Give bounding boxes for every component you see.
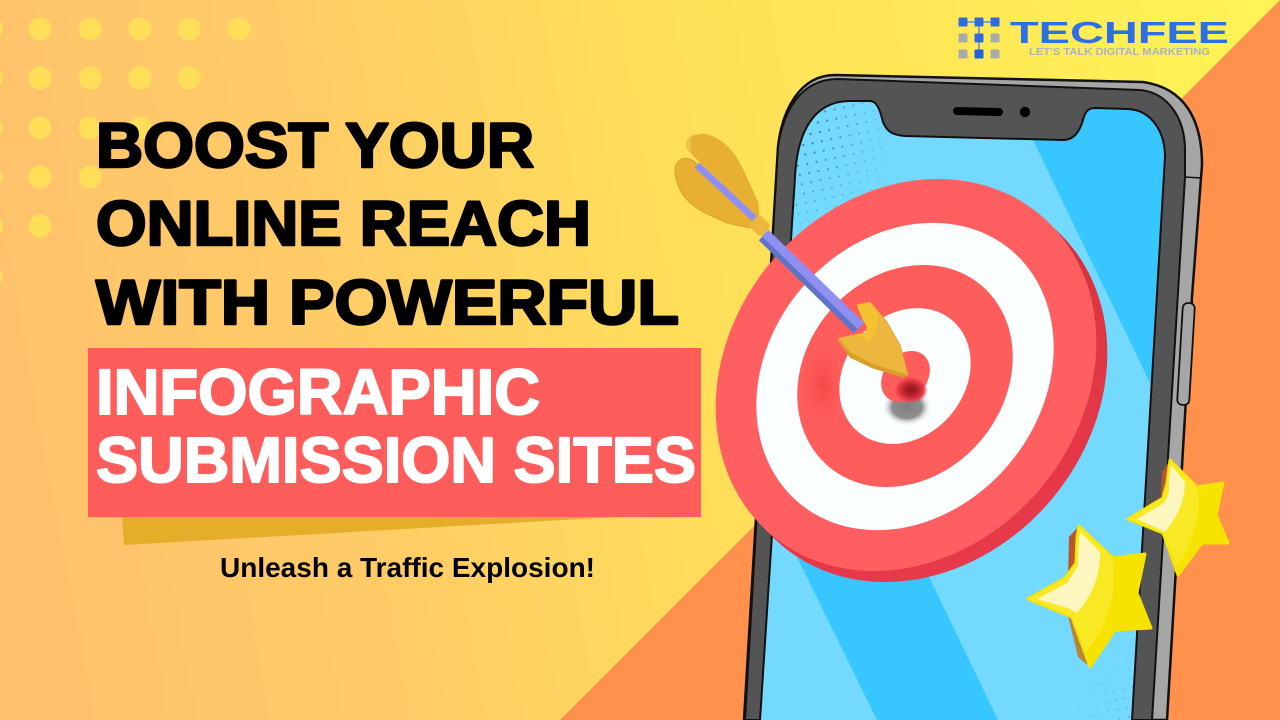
target board [637, 102, 1186, 659]
logo icon [958, 18, 1000, 58]
arrow shaft [763, 233, 861, 329]
decorative dot grid [0, 18, 250, 288]
camera [1020, 107, 1030, 117]
red banner [88, 348, 701, 517]
logo tagline: LET'S TALK DIGITAL MARKETING [1029, 47, 1210, 58]
headline line 3: WITH POWERFUL [96, 268, 679, 338]
target depth [648, 113, 1186, 659]
bullseye [871, 341, 940, 412]
orange diagonal triangle [560, 0, 1280, 720]
white ring [695, 163, 1115, 590]
banner text line 2: SUBMISSION SITES [96, 424, 696, 496]
phone frame [744, 75, 1202, 720]
headline [96, 111, 679, 338]
speaker [957, 111, 999, 112]
arrow [675, 134, 908, 377]
star face [1028, 526, 1151, 667]
logo: Techfee [958, 15, 1229, 58]
arrow collar [748, 214, 771, 237]
inner red ring [753, 221, 1057, 531]
banner shadow [122, 517, 615, 545]
shadow under arrow [882, 388, 932, 426]
smartphone [744, 75, 1202, 720]
star highlight [1137, 465, 1185, 532]
headline line 1: BOOST YOUR [96, 111, 534, 181]
arrow head [838, 302, 908, 377]
inner white ring [812, 282, 998, 470]
bullseye hit shade [894, 376, 928, 404]
subtitle: Unleash a Traffic Explosion! [220, 552, 595, 583]
side button [1177, 303, 1195, 405]
star face [1128, 460, 1228, 575]
phone bezel [745, 79, 1185, 720]
phone screen [755, 90, 1175, 720]
star: large [1028, 526, 1151, 667]
star: small [1128, 460, 1228, 575]
headline line 2: ONLINE REACH [96, 189, 591, 259]
ring shading [799, 337, 847, 433]
star midtone [1028, 526, 1114, 652]
arrow rear shaft [697, 165, 757, 221]
screen outline [760, 101, 1165, 720]
banner background [88, 348, 701, 517]
frame seam [1185, 177, 1201, 178]
arrow fletching [675, 134, 759, 228]
star midtone [1128, 460, 1198, 566]
star side [1157, 460, 1183, 575]
star highlight [1037, 532, 1100, 613]
banner text line 1: INFOGRAPHIC [96, 356, 540, 428]
star side [1068, 526, 1092, 667]
outer red ring [637, 102, 1175, 648]
logo wordmark: TECHFEE [1010, 15, 1229, 50]
